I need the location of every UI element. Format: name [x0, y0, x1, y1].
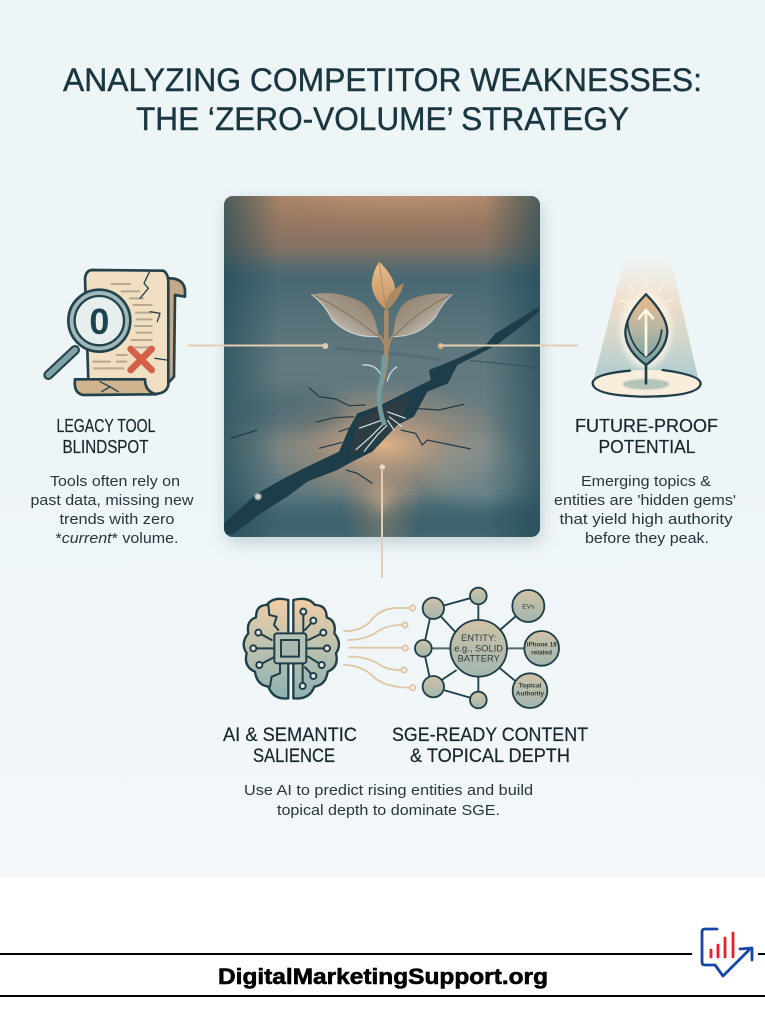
- text: bottom description: Use AI to predict rising entities and build: [244, 782, 533, 799]
- heading: legacy tool blindspot: BLINDSPOT: [62, 436, 148, 457]
- text: future-proof description: before they peak.: [585, 530, 709, 547]
- crack: hairline branches: [231, 388, 471, 483]
- heading: ai and semantic salience: SALIENCE: [253, 746, 335, 767]
- footer rule: bottom: [0, 995, 765, 997]
- zero glyph: 0: [89, 301, 109, 342]
- leaf: right: [393, 293, 452, 337]
- heading: future-proof potential: POTENTIAL: [598, 436, 696, 457]
- connector dots: [322, 343, 328, 349]
- connector lines: brain to entity graph: [343, 605, 415, 690]
- title: ANALYZING COMPETITOR WEAKNESSES:: [63, 62, 702, 98]
- heading: future-proof potential: [575, 415, 718, 457]
- icon: scroll with magnifying glass and zero: [48, 270, 185, 395]
- labels: entity nodes: BATTERY: [458, 654, 501, 664]
- roots: [356, 365, 406, 452]
- labels: entity nodes: ENTITY:: [461, 633, 496, 643]
- text: legacy tool description: past data, missing new: [30, 492, 194, 509]
- footer rule: top left: [0, 953, 692, 955]
- heading: ai and semantic salience: AI & SEMANTIC: [223, 725, 357, 746]
- heading: legacy tool blindspot: [56, 415, 156, 457]
- footer background: [0, 877, 765, 1024]
- labels: entity nodes: EVs: [522, 603, 535, 610]
- panel: central photo of sprout growing through cracked concrete: [224, 196, 540, 537]
- text: future-proof description: [554, 473, 736, 547]
- photo shadow: [226, 202, 542, 543]
- icon: red x: [131, 349, 152, 370]
- heading: future-proof potential: FUTURE-PROOF: [575, 415, 718, 436]
- labels: entity nodes: Topical: [519, 683, 542, 690]
- title: [63, 62, 702, 137]
- leaf: top: [372, 262, 395, 310]
- title: THE ‘ZERO-VOLUME’ STRATEGY: [136, 101, 629, 137]
- stem: [379, 310, 386, 425]
- heading: legacy tool blindspot: LEGACY TOOL: [56, 415, 156, 436]
- connector: right: [440, 344, 578, 346]
- icon: brain with chip: [244, 599, 339, 699]
- connector: left: [188, 344, 325, 346]
- magnifier handle: [48, 350, 75, 375]
- diagram: entity network: [415, 588, 559, 708]
- leaf: left: [311, 293, 378, 337]
- magnifier lens: [68, 290, 130, 352]
- labels: entity nodes: Authority: [516, 691, 545, 698]
- text: legacy tool description: trends with zero: [60, 511, 174, 528]
- text: legacy tool description: *current* volume.: [56, 530, 178, 547]
- icon: logo chart speech bubble with arrow: [702, 929, 752, 976]
- heading: sge-ready content and topical depth: [392, 725, 588, 767]
- footer rule: top right: [758, 953, 765, 955]
- text: legacy tool description: Tools often rely on: [50, 473, 180, 490]
- heading: sge-ready content and topical depth: & TOPICAL DEPTH: [410, 746, 570, 767]
- text: future-proof description: entities are 'hidden gems': [554, 492, 736, 509]
- labels: entity nodes: iPhone 18: [527, 642, 557, 649]
- labels: entity nodes: [454, 603, 557, 698]
- labels: entity nodes: e.g., SOLID: [454, 644, 503, 654]
- heading: ai and semantic salience: [223, 725, 357, 767]
- text: bottom description: topical depth to dominate SGE.: [277, 802, 500, 819]
- crack: main fissure: [224, 307, 539, 535]
- text: future-proof description: Emerging topics &: [581, 473, 711, 490]
- footer brand text: DigitalMarketingSupport.org: [218, 964, 548, 989]
- text: future-proof description: that yield high authority: [560, 511, 733, 528]
- text: legacy tool description: [30, 473, 194, 547]
- text: bottom description: [244, 782, 533, 819]
- heading: sge-ready content and topical depth: SGE-READY CONTENT: [392, 725, 588, 746]
- glints: [255, 493, 261, 500]
- connector: bottom: [381, 468, 383, 578]
- labels: entity nodes: related: [531, 650, 552, 657]
- icon: spotlight on leaf with arrow: [593, 257, 701, 397]
